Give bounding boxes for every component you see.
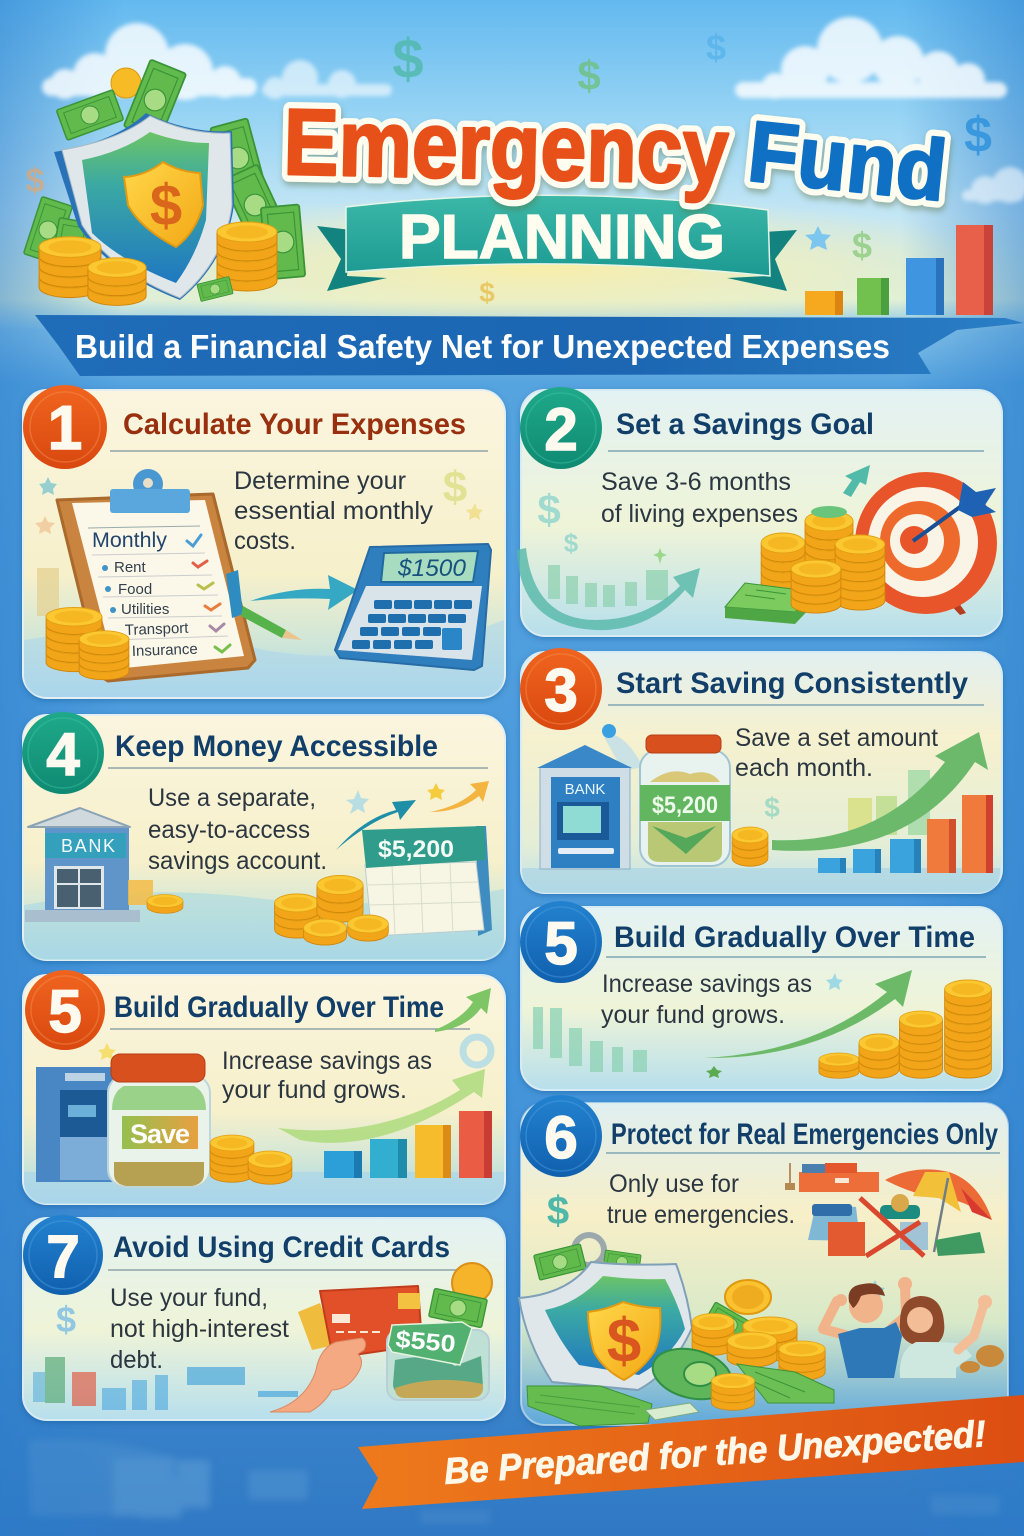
faded bars and dollar: $ — [56, 1299, 76, 1340]
panel: step 6 protect for real emergencies only — [519, 1095, 1008, 1426]
number badge — [22, 712, 104, 794]
body text: Increase savings as — [222, 1047, 432, 1075]
panel: step 7 avoid using credit cards — [23, 1215, 505, 1420]
arrow — [705, 970, 912, 1058]
body text: each month. — [735, 754, 873, 782]
icon: calendar with balance — [362, 826, 492, 936]
faded background shapes — [35, 477, 483, 616]
bar chart — [818, 795, 993, 873]
bills behind shield — [24, 59, 305, 282]
body text: Determine your — [234, 467, 406, 495]
arrows — [336, 781, 489, 850]
body text — [234, 467, 434, 555]
faded dollars, bars and growth arrow: $ — [564, 528, 579, 558]
decorative dollar signs: $ — [392, 27, 424, 90]
arrow — [843, 465, 870, 497]
arrow — [772, 732, 988, 851]
number badge: 6 — [544, 1104, 578, 1171]
icon: bank — [25, 808, 140, 922]
dollar: $ — [547, 1189, 569, 1233]
icon: bank atm — [537, 724, 643, 869]
faded bars and dollar: $ — [764, 792, 780, 823]
heading: Build Gradually Over Time — [114, 991, 444, 1024]
heading: Calculate Your Expenses — [123, 408, 466, 441]
icon: savings jar — [108, 1054, 210, 1187]
gold badge — [124, 162, 203, 247]
arrow — [278, 1069, 485, 1143]
subtitle ribbon: Build a Financial Safety Net for Unexpected Expenses — [75, 328, 890, 365]
faded dollars, bars and growth arrow — [517, 486, 700, 630]
icon: coins — [210, 1135, 292, 1184]
number badge — [520, 387, 602, 469]
heading: Avoid Using Credit Cards — [113, 1231, 450, 1264]
icon: bill — [429, 1288, 487, 1328]
body text: Increase savings as — [602, 970, 812, 998]
icon: non-emergency items crossed out — [785, 1163, 992, 1256]
icon: pencil — [226, 570, 302, 640]
title — [283, 89, 951, 220]
number badge — [25, 970, 105, 1050]
icon: clipboard checklist — [57, 469, 255, 681]
loose bill — [197, 276, 233, 302]
coin behind shield — [111, 68, 141, 98]
panel: step 1 calculate your expenses — [23, 385, 505, 698]
icon: small coins — [128, 880, 183, 913]
body text — [607, 1170, 795, 1229]
heading: Build Gradually Over Time — [614, 921, 975, 954]
icon: large shield — [519, 1235, 692, 1390]
body text — [222, 1047, 432, 1104]
water ground — [24, 620, 504, 697]
body text: Only use for — [609, 1170, 739, 1198]
faded gear and star — [98, 1037, 491, 1065]
star — [805, 226, 831, 250]
bar chart — [324, 1111, 492, 1178]
body text: costs. — [234, 527, 296, 555]
icon: calculator — [335, 544, 491, 670]
hero icon: shield with money — [24, 59, 305, 305]
icon: large shield: $ — [607, 1307, 641, 1376]
faded star — [346, 790, 369, 814]
number badge — [520, 1095, 602, 1177]
icon: jar with balance — [387, 1322, 489, 1400]
number badge: 1 — [48, 394, 82, 463]
icon: clipboard checklist: Insurance — [132, 641, 198, 660]
panel: step 5 build gradually (right) — [520, 901, 1002, 1090]
ground — [522, 868, 1000, 893]
panel: step 4 keep money accessible — [22, 712, 505, 960]
body text: Save a set amount — [735, 724, 938, 752]
decorative dollar signs: $ — [964, 107, 992, 163]
number badge: 7 — [46, 1223, 80, 1290]
body text: Use your fund, — [110, 1284, 268, 1312]
hero icon: shield with money: $ — [150, 173, 182, 238]
heading: Keep Money Accessible — [115, 730, 438, 763]
body text: savings account. — [148, 847, 327, 875]
body text: essential monthly — [234, 497, 434, 525]
icon: clipboard checklist: Rent — [114, 559, 147, 576]
decorative dollar signs: $ — [577, 52, 601, 99]
body text: of living expenses — [601, 500, 798, 528]
icon: coin stacks — [761, 506, 885, 612]
number badge — [23, 385, 107, 469]
title: Emergency — [283, 89, 730, 203]
body text — [601, 468, 798, 528]
body text: true emergencies. — [607, 1201, 795, 1229]
icon: coin — [452, 1263, 492, 1303]
planning ribbon — [317, 195, 797, 291]
number badge — [520, 901, 602, 983]
panel: step 5 build gradually (left) — [23, 970, 505, 1204]
decorative dollar signs: $ — [706, 27, 726, 68]
icon: front coin stack — [791, 560, 841, 613]
arrow — [250, 575, 358, 610]
icon: jar with balance: $550 — [394, 1326, 457, 1358]
body text — [601, 970, 812, 1029]
bottom banner — [358, 1395, 1024, 1509]
faded dollars, bars and growth arrow: $ — [537, 486, 561, 533]
number badge: 5 — [48, 978, 82, 1045]
icon: bill stack — [725, 583, 816, 624]
faded dollar: $ — [443, 463, 467, 512]
number badge: 2 — [544, 396, 578, 463]
shield frame — [54, 113, 234, 300]
coin stacks — [39, 237, 101, 298]
subtitle ribbon — [35, 315, 1024, 376]
icon: bank: BANK — [61, 836, 115, 856]
body text: not high-interest — [110, 1315, 289, 1343]
number badge — [520, 648, 602, 730]
decorative dollar signs — [26, 27, 992, 308]
panel: step 2 set a savings goal — [517, 387, 1002, 636]
decorative dollar signs: $ — [26, 162, 45, 200]
title: Fund — [744, 103, 951, 220]
body text: Use a separate, — [148, 784, 316, 812]
body text: easy-to-access — [148, 816, 310, 844]
icon: coins and cash pile — [527, 1280, 834, 1426]
icon: coin pile — [274, 876, 388, 945]
decorative dollar signs: $ — [479, 277, 495, 308]
icon: credit cards — [298, 1286, 422, 1358]
faded bars and dollar — [33, 1299, 298, 1410]
decorative dollar signs: $ — [852, 225, 872, 266]
icon: rising coin stacks — [819, 980, 991, 1078]
icon: calendar with balance: $5,200 — [378, 836, 454, 863]
body text — [735, 724, 938, 782]
icon: clipboard checklist: Monthly — [92, 529, 168, 552]
icon: coin stacks — [46, 608, 129, 680]
body text: debt. — [110, 1346, 163, 1374]
clouds — [42, 17, 1024, 204]
icon: savings jar: Save — [130, 1119, 190, 1149]
icon: clipboard checklist: Transport — [125, 620, 190, 639]
icon: coins — [732, 827, 768, 866]
ground — [24, 889, 504, 960]
faded skyline at page bottom — [28, 1439, 1000, 1524]
body text: your fund grows. — [601, 1001, 785, 1029]
body text — [148, 784, 327, 875]
body text: Save 3-6 months — [601, 468, 791, 496]
faded bars and dollar — [764, 770, 930, 835]
icon: atm — [36, 1067, 116, 1182]
icon: clipboard checklist: Utilities — [121, 601, 169, 618]
faded star — [865, 1280, 885, 1300]
heading: Set a Savings Goal — [616, 408, 874, 441]
heading: Start Saving Consistently — [616, 667, 968, 700]
planning label: PLANNING — [399, 203, 725, 272]
icon: jar with balance: $5,200 — [652, 792, 718, 819]
icon: celebrating couple — [823, 1277, 1004, 1378]
icon: clipboard checklist: Food — [118, 581, 152, 598]
body text: your fund grows. — [222, 1076, 407, 1104]
ground — [24, 1172, 504, 1204]
icon: calculator: $1500 — [397, 555, 467, 582]
bottom banner: Be Prepared for the Unexpected! — [443, 1413, 987, 1492]
number badge — [23, 1215, 103, 1295]
number badge: 4 — [46, 721, 80, 788]
number badge: 5 — [544, 910, 578, 977]
panel: step 3 start saving consistently — [520, 648, 1002, 893]
growth bars in header — [805, 225, 993, 315]
icon: hand — [270, 1338, 366, 1412]
number badge: 3 — [544, 657, 578, 724]
icon: bank atm: BANK — [565, 781, 605, 798]
title: Fund — [744, 103, 951, 220]
icon: jar with balance — [640, 735, 730, 866]
arrow — [435, 988, 491, 1032]
title: Emergency — [283, 89, 730, 203]
faded bars, star and leaf — [533, 973, 843, 1078]
icon: target with dart — [855, 472, 997, 615]
shield face — [82, 132, 209, 283]
body text — [110, 1284, 289, 1374]
